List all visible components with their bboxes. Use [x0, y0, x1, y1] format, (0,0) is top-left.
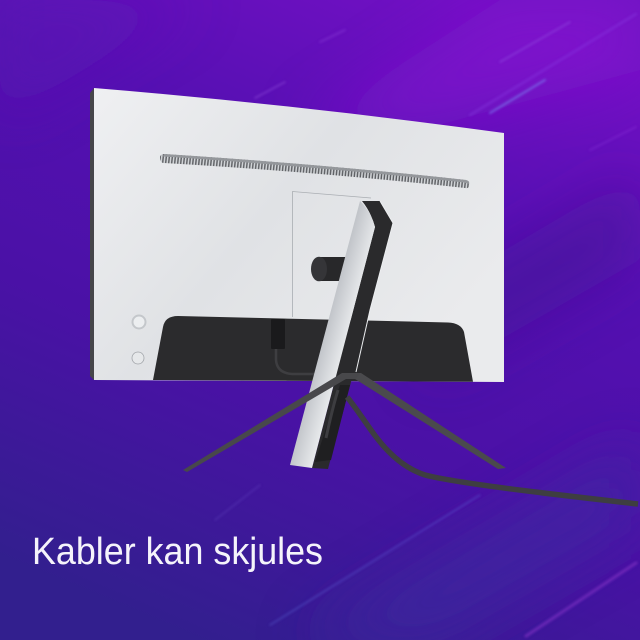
- cable channel: [315, 385, 350, 462]
- stand white highlight: [356, 201, 393, 372]
- dark cutout: [153, 316, 473, 382]
- round button top: [132, 314, 146, 330]
- monitor: [90, 88, 504, 382]
- rear legs and stand: [183, 201, 638, 504]
- monitor back panel: [94, 88, 504, 382]
- ventilation slot: [160, 154, 469, 188]
- stand dark side: [312, 201, 393, 469]
- cable behind monitor: [276, 349, 316, 374]
- stand silver face: [290, 201, 375, 468]
- caption: Kabler kan skjules: [32, 531, 323, 573]
- right leg: [355, 373, 506, 469]
- round button bottom: [132, 352, 144, 364]
- monitor side edge: [90, 88, 94, 380]
- mount knob: [311, 257, 346, 281]
- cable: [347, 397, 638, 504]
- cable plug: [271, 319, 285, 349]
- left leg: [183, 373, 361, 472]
- cable clip: [326, 390, 338, 438]
- VESA cover outline: [292, 192, 371, 317]
- light streaks: [215, 14, 636, 636]
